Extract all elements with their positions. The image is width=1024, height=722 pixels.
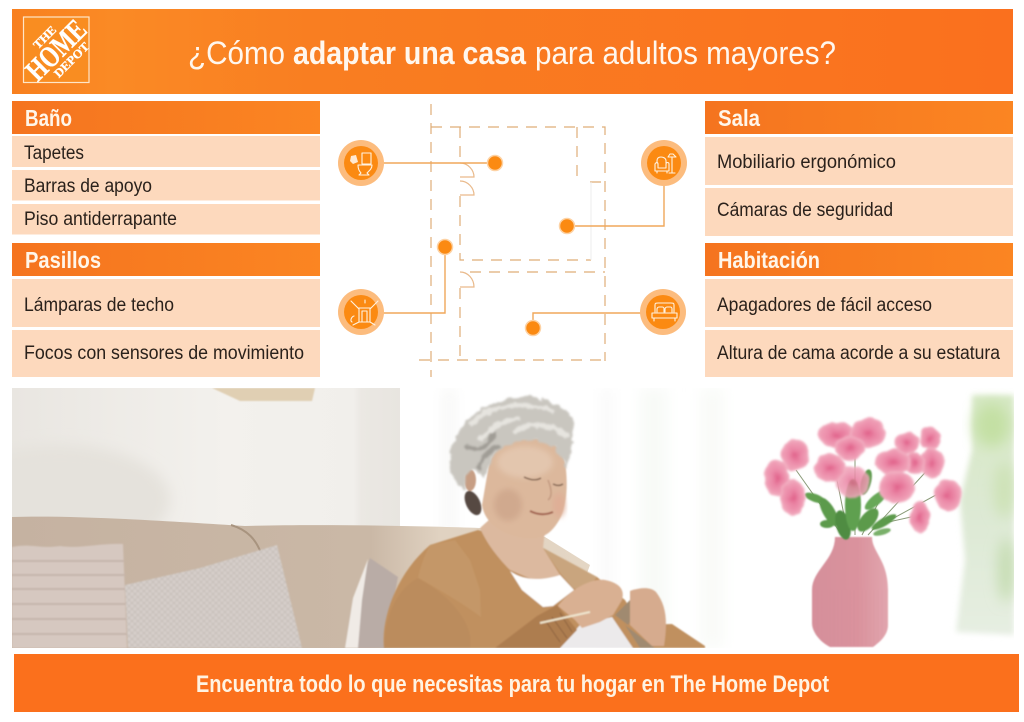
face: [482, 438, 567, 538]
icon: bedroom: [640, 289, 686, 335]
panel: Baño: Baño: [25, 105, 72, 131]
curtain: [444, 388, 724, 648]
panel: Baño: [12, 101, 320, 234]
header banner: [12, 8, 1013, 94]
panel: Pasillos: Focos con sensores de movimiento: [24, 343, 304, 364]
panel: Sala: Cámaras de seguridad: [717, 200, 893, 221]
icon: hallway: [338, 289, 384, 335]
title: para adultos mayores?: [535, 35, 836, 71]
footer banner: Encuentra todo lo que necesitas para tu hogar en The Home Depot: [196, 671, 829, 698]
pillows: [12, 544, 398, 648]
icon: living room: [641, 140, 687, 186]
vase: [812, 537, 888, 647]
panel: Pasillos: Lámparas de techo: [24, 295, 174, 316]
shelf: [212, 388, 315, 401]
knitting: [615, 600, 655, 648]
title: adaptar una casa: [293, 35, 526, 71]
panel: Habitación: Habitación: [718, 247, 820, 273]
flowers: [764, 418, 962, 533]
panel: Habitación: [705, 243, 1013, 377]
leaves: [803, 468, 898, 541]
panel: Sala: Sala: [718, 105, 760, 131]
wall: [12, 388, 400, 526]
hair: [450, 397, 575, 490]
icon: bathroom: [338, 140, 384, 186]
hand right: [630, 588, 666, 646]
sofa: [12, 517, 590, 648]
hand left: [558, 580, 623, 628]
marker dots: [438, 156, 574, 336]
panel: Sala: [705, 101, 1013, 236]
panel: Sala: Mobiliario ergonómico: [717, 152, 896, 173]
cardigan: [384, 530, 705, 648]
photo: older woman knitting on a sofa: [0, 388, 1014, 648]
footer banner: [14, 654, 1019, 712]
floor plan diagram: [338, 104, 687, 377]
panel: Habitación: Altura de cama acorde a su estatura: [717, 343, 1000, 364]
title: [188, 35, 836, 71]
window: [956, 395, 1014, 635]
logo: The Home Depot: DEPOT: [51, 39, 92, 80]
connector lines: [361, 163, 664, 328]
cuff: [495, 605, 577, 648]
panel: Baño: Tapetes: [24, 143, 84, 164]
blouse: [510, 571, 574, 607]
panel: Pasillos: Pasillos: [25, 247, 101, 273]
woman: [384, 438, 705, 648]
logo: The Home Depot: THE: [30, 23, 59, 52]
panel: Habitación: Apagadores de fácil acceso: [717, 295, 932, 316]
panel: Baño: Barras de apoyo: [24, 176, 152, 197]
panel: Pasillos: [12, 243, 320, 377]
panel: Baño: Piso antiderrapante: [24, 209, 177, 230]
title: ¿Cómo: [188, 35, 285, 71]
stems: [796, 458, 936, 536]
neck: [480, 520, 560, 580]
door arcs: [460, 163, 474, 287]
